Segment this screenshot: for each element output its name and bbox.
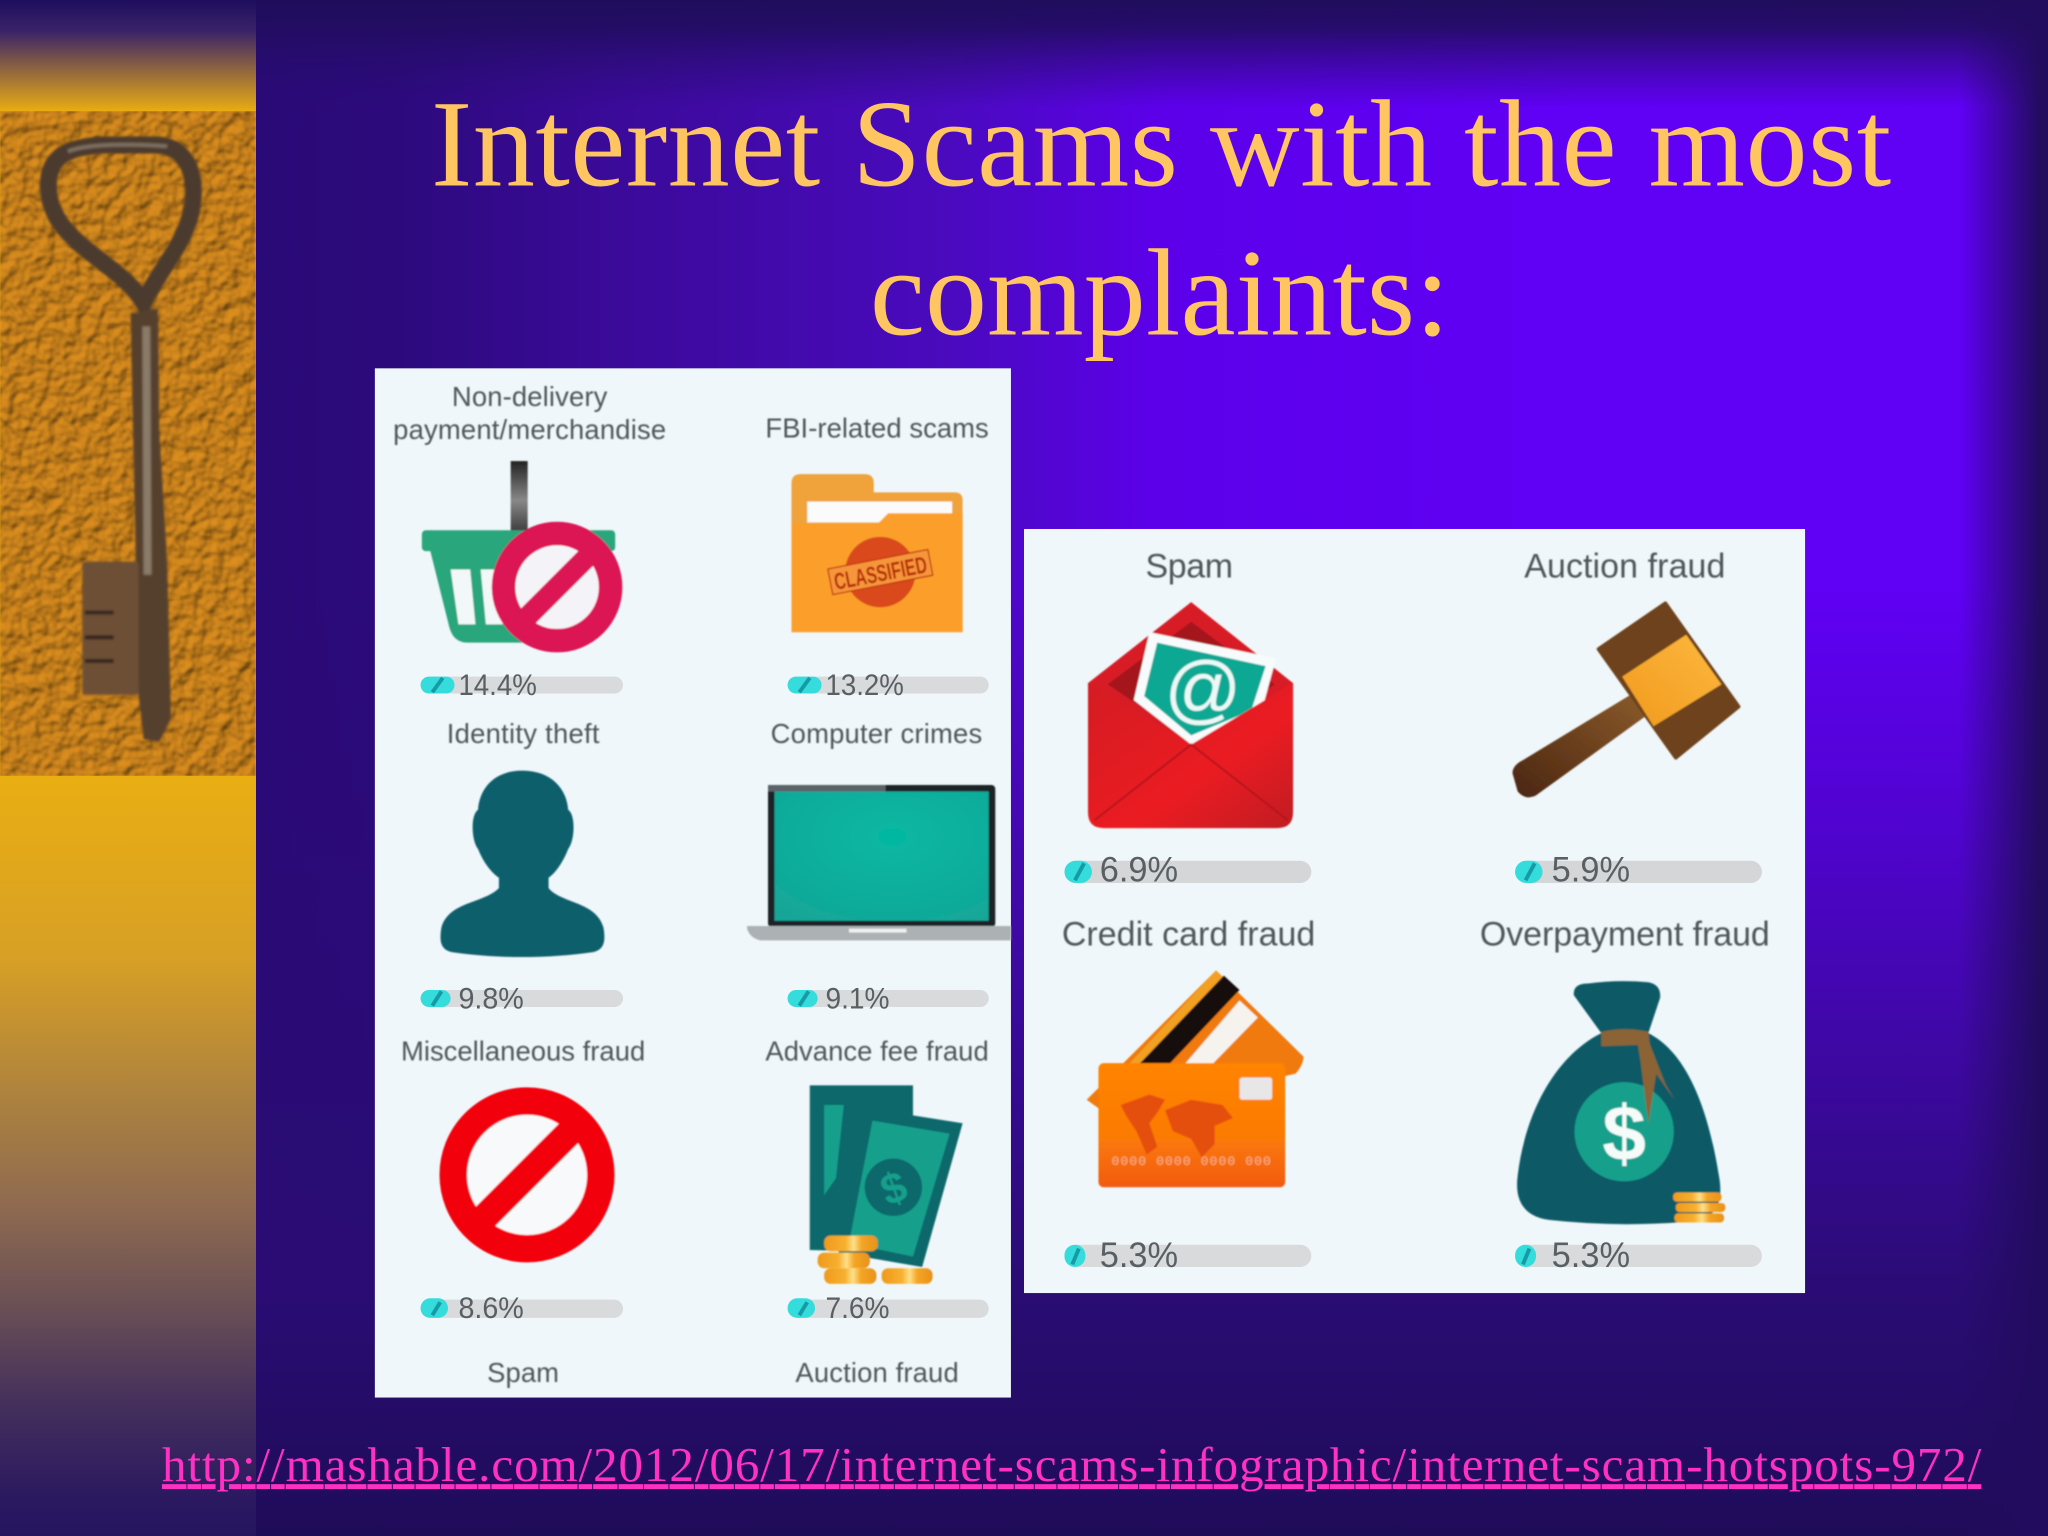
label: advance fee fraud: Advance fee fraud <box>765 1036 989 1067</box>
icon: red envelope with at sign <box>1088 602 1293 828</box>
label: computer crimes: Computer crimes <box>771 718 982 749</box>
icon: banknotes and coins <box>810 1085 963 1284</box>
icon: money bag: $ <box>1602 1089 1646 1177</box>
bar: 8.6%: 8.6% <box>458 1292 524 1325</box>
label: identity theft: Identity theft <box>447 718 600 749</box>
bar: 9.8% <box>421 982 623 1015</box>
icon: laptop <box>747 785 1011 940</box>
label: non-delivery: Non-delivery <box>452 381 608 412</box>
bar: 5.3% overpayment <box>1515 1236 1762 1275</box>
title: complaints: <box>870 223 1450 361</box>
icon: classified folder <box>792 474 963 632</box>
bar: 13.2%: 13.2% <box>825 669 904 702</box>
photo: old key on sand <box>0 111 256 776</box>
icon: prohibition sign <box>453 1101 601 1249</box>
bar: 14.4%: 14.4% <box>458 669 537 702</box>
title <box>431 74 1891 361</box>
label: spam: Spam <box>1145 547 1233 585</box>
icon: classified folder: CLASSIFIED <box>832 551 929 595</box>
bar: 8.6% <box>421 1292 623 1325</box>
bar: 9.1% <box>788 982 989 1015</box>
label: non-delivery: payment/merchandise <box>393 414 666 445</box>
panel: top scam categories left <box>375 368 1011 1398</box>
bar: 5.9%: 5.9% <box>1552 851 1630 890</box>
label: auction fraud: Auction fraud <box>1524 547 1725 585</box>
icon: money bag <box>1517 981 1725 1224</box>
icon: red envelope with at sign: @ <box>1164 646 1241 731</box>
panel: scam categories right <box>1024 529 1805 1293</box>
title: Internet Scams with the most <box>431 74 1891 212</box>
label: credit card fraud: Credit card fraud <box>1062 916 1315 954</box>
left sidebar gold band <box>0 0 256 1536</box>
label: spam (cut off row): Spam <box>487 1357 559 1388</box>
bar: 7.6%: 7.6% <box>825 1292 889 1325</box>
icon: banknotes and coins: $ <box>874 1162 913 1215</box>
label: FBI-related scams: FBI-related scams <box>765 413 989 444</box>
icon: credit cards <box>1087 970 1304 1187</box>
label: overpayment fraud: Overpayment fraud <box>1480 916 1770 954</box>
icon: credit cards: 0000 0000 0000 000 <box>1112 1154 1271 1169</box>
icon: basket with prohibition sign <box>422 461 615 643</box>
bar: 5.9% <box>1515 851 1762 890</box>
bar: 7.6% <box>788 1292 989 1325</box>
label: auction fraud (cut off row): Auction fraud <box>795 1357 959 1388</box>
icon: person silhouette <box>441 771 604 957</box>
bar: 14.4% <box>421 669 623 702</box>
label: miscellaneous fraud: Miscellaneous fraud <box>401 1036 645 1067</box>
bar: 6.9% <box>1064 851 1311 890</box>
bar: 6.9%: 6.9% <box>1100 851 1178 890</box>
bar: 5.3% credit card: 5.3% <box>1100 1236 1178 1275</box>
bar: 5.3% overpayment: 5.3% <box>1552 1236 1630 1275</box>
icon: auction gavel <box>1512 603 1738 797</box>
bar: 13.2% <box>788 669 989 702</box>
bar: 9.1%: 9.1% <box>825 982 889 1015</box>
source link: http://mashable.com/2012/06/17/internet-scams-infographic/internet-scam-hotspots-972/ <box>162 1437 1982 1492</box>
bar: 5.3% credit card <box>1064 1236 1311 1275</box>
bar: 9.8%: 9.8% <box>458 982 524 1015</box>
